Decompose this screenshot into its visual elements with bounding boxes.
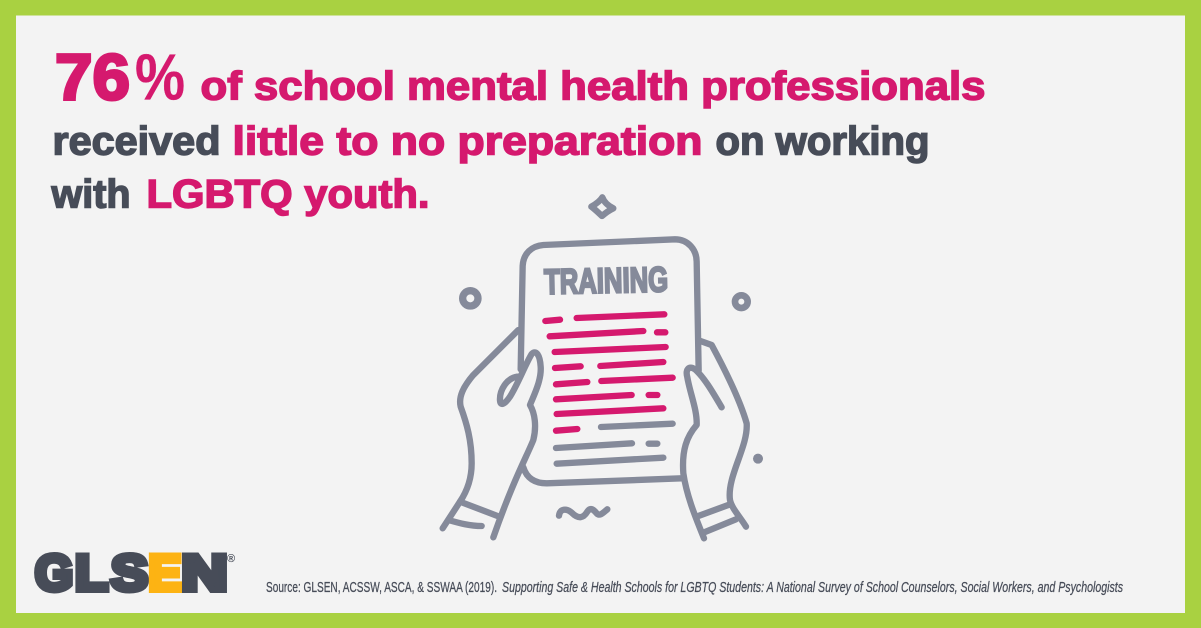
GLSEN logo: N bbox=[182, 544, 228, 601]
headline line 3: LGBTQ youth. bbox=[146, 172, 430, 216]
source citation bbox=[266, 580, 1123, 596]
pink text lines bbox=[545, 314, 673, 431]
statistic 76%: 76 bbox=[55, 40, 130, 114]
GLSEN logo: G bbox=[35, 544, 73, 601]
GLSEN logo bbox=[35, 544, 235, 601]
statistic 76% bbox=[55, 40, 185, 114]
GLSEN logo: E bbox=[148, 544, 182, 601]
left hand bbox=[443, 330, 541, 537]
GLSEN logo: ® bbox=[227, 553, 235, 565]
right hand bbox=[683, 341, 747, 538]
source citation: Source: GLSEN, ACSSW, ASCA, & SSWAA (2019). bbox=[266, 580, 497, 596]
headline line 2: on working bbox=[716, 120, 930, 164]
grey text lines bbox=[556, 424, 673, 464]
document title: TRAINING bbox=[544, 260, 668, 302]
GLSEN logo: L bbox=[75, 544, 108, 601]
headline line 3: with bbox=[50, 172, 130, 216]
headline line 2 bbox=[52, 120, 930, 164]
document outline bbox=[521, 239, 699, 483]
headline line 2: little to no preparation bbox=[232, 120, 702, 164]
statistic 76%: % bbox=[135, 40, 185, 114]
headline line 1: of school mental health professionals bbox=[200, 64, 986, 108]
icon: right ring bbox=[735, 295, 748, 308]
headline line 2: received bbox=[52, 120, 220, 164]
icon: left ring bbox=[463, 291, 478, 306]
icon: diamond sparkle bbox=[591, 197, 613, 216]
headline bbox=[50, 40, 985, 216]
illustration: hands holding training document bbox=[443, 197, 763, 538]
icon: squiggle bbox=[559, 509, 607, 517]
icon: dot bbox=[753, 454, 763, 464]
GLSEN logo: S bbox=[111, 544, 148, 601]
